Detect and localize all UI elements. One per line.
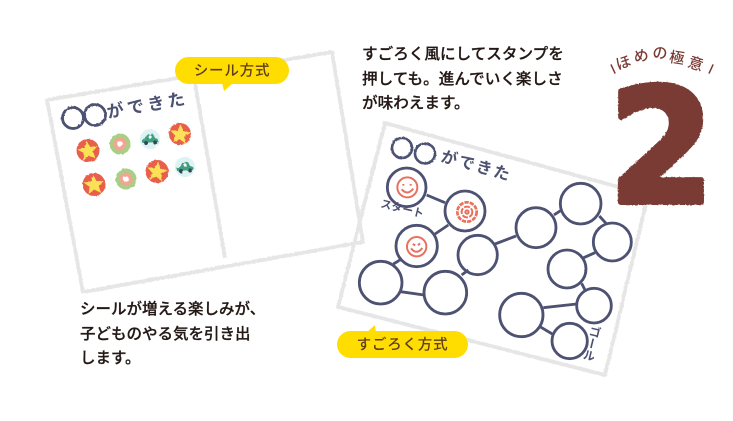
text block: sticker description xyxy=(80,300,265,367)
badge: praise secret heading xyxy=(610,45,714,75)
badge: praise secret heading: 極 xyxy=(668,49,686,68)
stickers xyxy=(75,122,195,197)
sheet title: ができた xyxy=(105,88,190,122)
sheet outline xyxy=(338,123,648,375)
sheet title xyxy=(62,88,190,128)
callout: seal method: シール方式 xyxy=(194,62,270,80)
text block: sugoroku description xyxy=(362,46,564,112)
start label: スタート xyxy=(379,197,425,221)
sheet title xyxy=(392,138,514,185)
text block: sticker description: シールが増える楽しみが、 xyxy=(80,301,265,318)
badge: praise secret heading: め xyxy=(632,47,650,66)
text block: sugoroku description: が味わえます。 xyxy=(362,95,470,112)
text block: sticker description: 子どものやる気を引き出 xyxy=(80,326,251,342)
panel: sugoroku sheet xyxy=(338,123,648,375)
big numeral 2: 2 xyxy=(609,55,714,240)
badge: praise secret heading: の xyxy=(652,45,668,62)
callout: sugoroku method xyxy=(337,325,468,358)
board path xyxy=(359,168,631,359)
sheet title: ができた xyxy=(439,147,514,185)
text block: sugoroku description: すごろく風にしてスタンプを xyxy=(362,46,564,63)
panel: sticker sheet xyxy=(47,52,363,292)
text block: sugoroku description: 押しても。進んでいく楽しさ xyxy=(362,70,563,88)
badge: praise secret heading: ほ xyxy=(614,53,633,74)
callout: seal method xyxy=(175,57,289,91)
badge: praise secret heading: 意 xyxy=(686,54,705,75)
goal label: ゴール xyxy=(580,323,603,363)
stamps xyxy=(397,177,477,256)
callout: sugoroku method: すごろく方式 xyxy=(357,336,448,354)
text block: sticker description: します。 xyxy=(80,350,140,367)
sheet outline xyxy=(47,52,363,292)
